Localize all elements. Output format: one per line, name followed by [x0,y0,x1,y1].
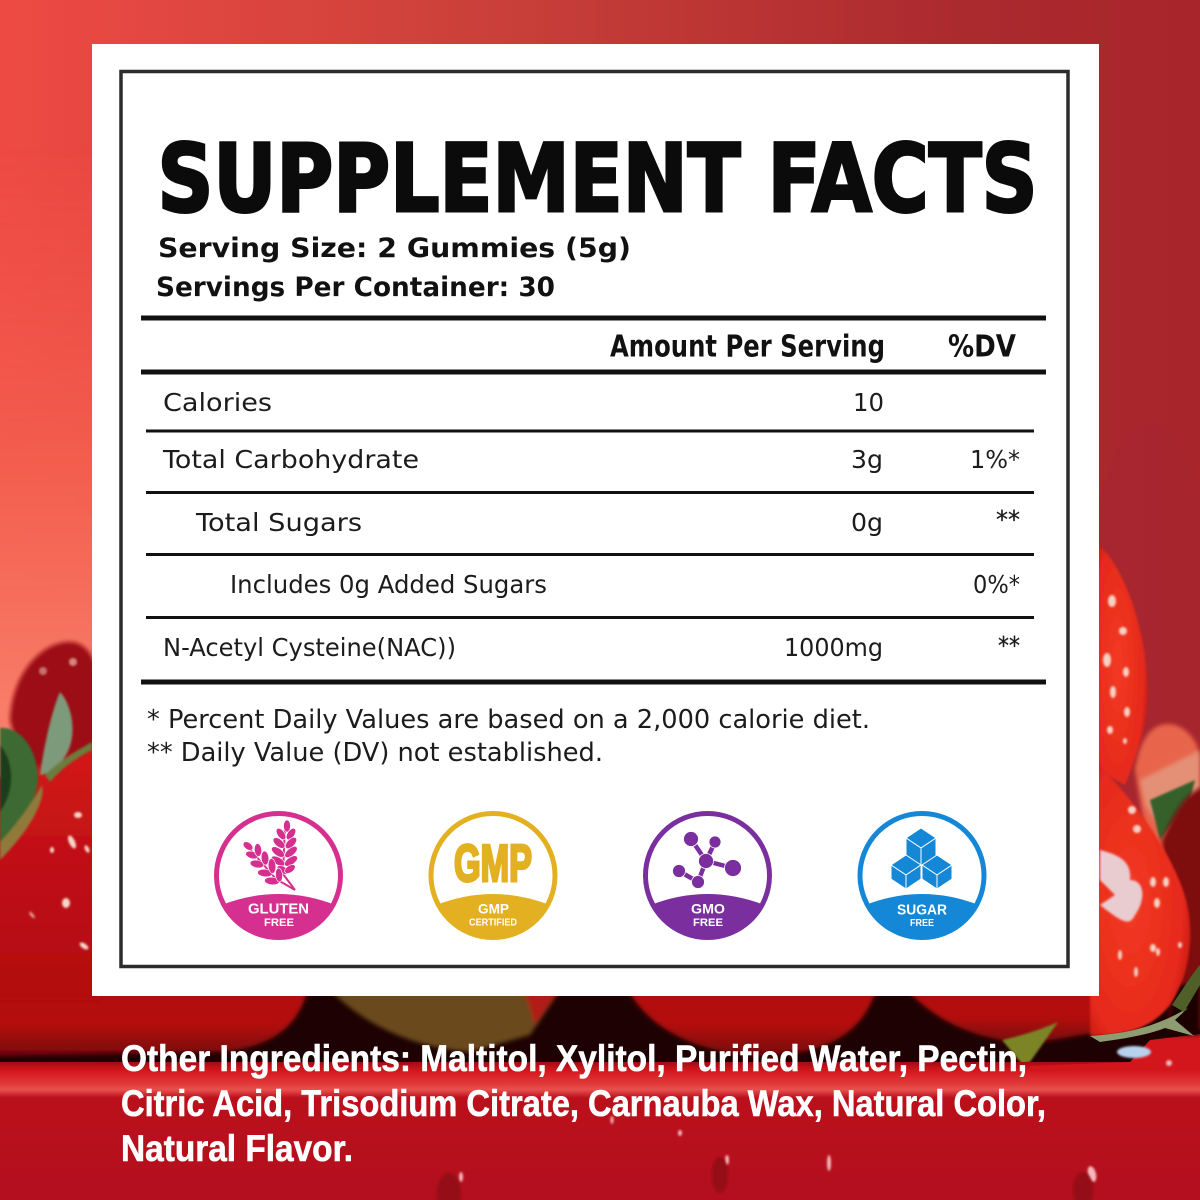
table header: %DV [948,330,1017,364]
water drops [459,1060,1172,1183]
green calyx under the right strawberries [1002,1022,1058,1064]
badge label: FREE [693,917,723,929]
serving information [156,233,631,303]
back left strawberry [10,642,100,800]
right strawberry stem leaves [1090,965,1200,1042]
strawberry leaves left [0,692,92,860]
panel: supplement facts card [92,44,1099,996]
badge label: GMP [478,902,509,916]
bottom dark band with strawberries [0,985,1200,1085]
badge: gluten free [216,814,340,940]
row: N-acetyl cysteine: ** [998,631,1020,660]
row: total carbohydrate: 1%* [970,445,1020,474]
far right dark strawberry [1162,785,1200,1030]
table header: Amount Per Serving [610,330,885,364]
row: N-acetyl cysteine [163,631,1020,662]
upper right strawberry [1098,545,1147,785]
other ingredients text: Natural Flavor. [121,1128,353,1169]
row: total carbohydrate [162,445,1020,474]
badge: sugar free [860,814,984,939]
row: total carbohydrate: 3g [851,445,883,474]
row: N-acetyl cysteine: N-Acetyl Cysteine(NAC)) [163,633,456,662]
row: calories: Calories [163,388,272,417]
row: added sugars [230,570,1020,599]
footnotes: ** Daily Value (DV) not established. [147,738,603,768]
left strawberry seeds [28,658,91,951]
serving information: Serving Size: 2 Gummies (5g) [158,233,631,264]
badge label [248,902,309,929]
red table surface [0,1062,1200,1200]
right strawberry seeds [1103,595,1182,977]
badge label: FREE [264,917,294,929]
badge label: GMO [691,902,725,916]
badge label [897,902,947,929]
badge label: SUGAR [897,902,947,918]
badge: GMO free [646,814,770,940]
icon: wheat [241,820,299,890]
badge label: CERTIFIED [469,918,517,928]
serving information: Servings Per Container: 30 [156,272,555,303]
row: calories [163,388,884,417]
other ingredients text: Other Ingredients: Maltitol, Xylitol, Purified Water, Pectin, [121,1038,1027,1079]
row: N-acetyl cysteine: 1000mg [784,633,883,662]
footnotes [147,705,870,768]
badge label [469,902,517,928]
icon: molecule [672,832,742,888]
badge: GMP certified [431,814,555,939]
badge label: GLUTEN [248,902,309,918]
big right strawberry [1090,765,1190,1036]
row: total carbohydrate: Total Carbohydrate [162,445,419,474]
footnotes: * Percent Daily Values are based on a 2,000 calorie diet. [147,705,870,735]
nutrition table [141,316,1046,684]
badge label [691,902,725,929]
other ingredients text [121,1038,1046,1169]
row: added sugars: Includes 0g Added Sugars [230,570,547,599]
row: total sugars: ** [996,505,1020,534]
row: total sugars: Total Sugars [195,508,362,537]
row: calories: 10 [853,388,884,417]
icon: GMP lettering: GMP [454,835,532,893]
row: total sugars: 0g [851,508,883,537]
water glare on right strawberry [1100,850,1142,922]
other ingredients text: Citric Acid, Trisodium Citrate, Carnauba Wax, Natural Color, [121,1083,1046,1124]
front left strawberry [0,745,100,1000]
row: added sugars: 0%* [973,570,1020,599]
title: SUPPLEMENT FACTS [158,125,1038,234]
row: total sugars [195,505,1020,537]
far right pale strawberry [1135,724,1200,860]
badge label: FREE [910,917,934,929]
icon: sugar cubes [891,828,952,889]
